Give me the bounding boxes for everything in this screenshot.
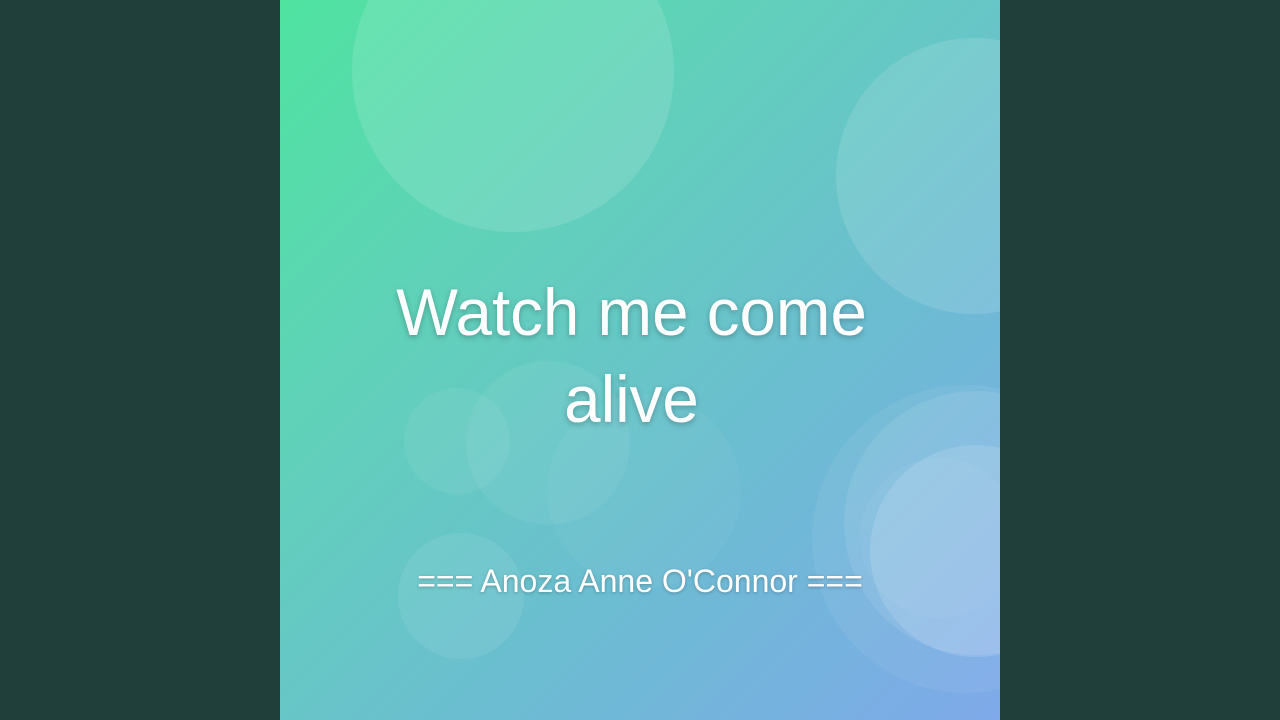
title: Watch me come xyxy=(396,276,867,349)
title: alive xyxy=(564,363,699,436)
title xyxy=(395,276,867,436)
artist credit: === Anoza Anne O'Connor === xyxy=(417,563,863,599)
album cover panel xyxy=(280,0,1000,720)
decorative bokeh circles xyxy=(352,0,1000,659)
